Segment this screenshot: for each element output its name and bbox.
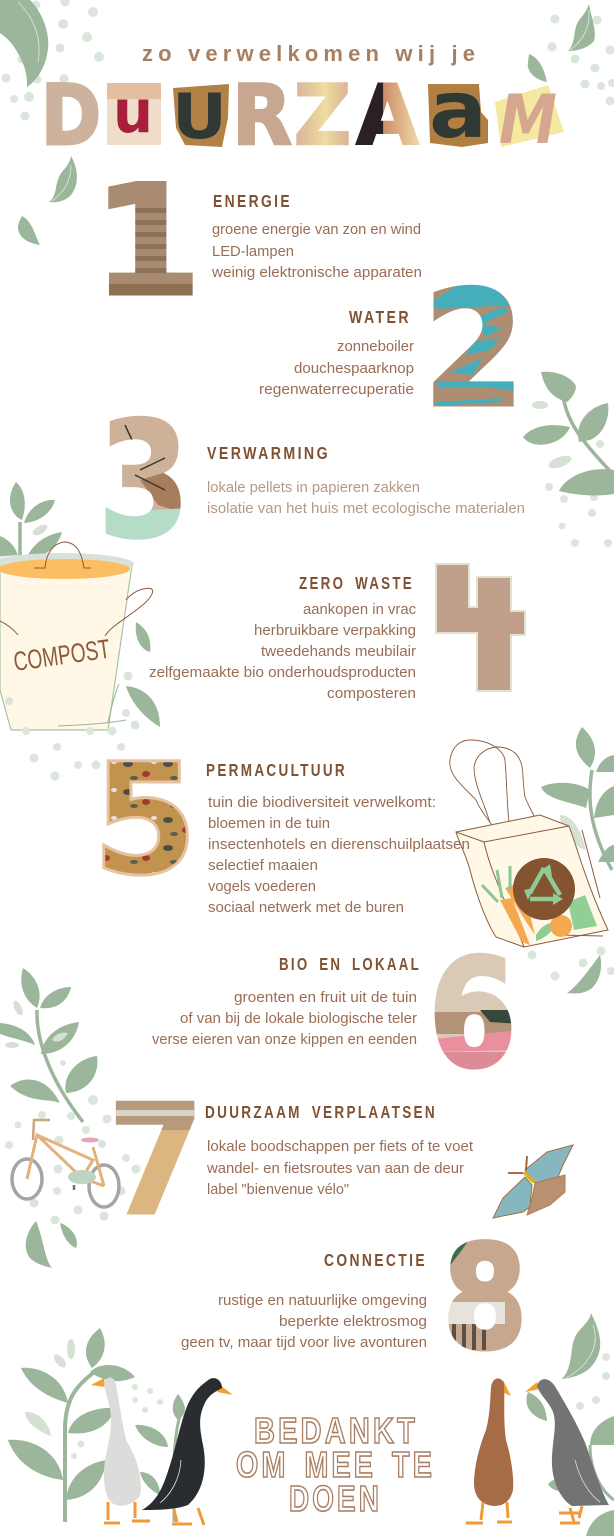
list connectie: geen tv, maar tijd voor live avonturen [181,1335,427,1351]
heading energie: ENERGIE [213,191,292,211]
list zero waste: herbruikbare verpakking [254,623,416,639]
heading: DUURZAAM collage letters: D [41,67,101,164]
plant: right of section 2 and 3 [523,372,614,547]
list zero waste: composteren [327,686,416,702]
heading zero waste: ZERO WASTE [299,573,414,593]
duck: brown [466,1378,513,1523]
heading: DUURZAAM collage letters: Z [294,67,351,164]
list zero waste: aankopen in vrac [303,602,416,618]
heading: DUURZAAM collage letters: A [356,67,419,164]
list verwarming: lokale pellets in papieren zakken [207,480,420,496]
digit 3: 3 [98,387,190,574]
plant: bottom left [8,1328,185,1522]
section 2: water [259,256,525,443]
list duurzaam verplaatsen: wandel- en fietsroutes van aan de deur [206,1161,464,1177]
list water: zonneboiler [337,339,414,355]
list permacultuur: tuin die biodiversiteit verwelkomt: [208,795,436,811]
section 8: connectie [181,1216,527,1381]
list energie [211,222,422,281]
digit 4 [435,563,526,692]
digit 7: 7 [108,1072,204,1249]
bag handles [450,740,542,847]
closing message: OM MEE TE [236,1444,435,1485]
list bio en lokaal [152,990,417,1048]
heading water: WATER [349,307,411,327]
leaf: left of digit 1 large [49,156,77,202]
compost bucket [0,542,153,730]
digit 1: 1 [92,153,202,331]
duck: white [91,1378,150,1523]
list energie: weinig elektronische apparaten [211,265,422,281]
section 1: energie [92,153,422,331]
leaves beside compost bucket [5,622,160,736]
section 6: bio en lokaal [152,928,516,1100]
list permacultuur: selectief maaien [208,858,318,874]
list zero waste [149,602,416,702]
title line: zo verwelkomen wij je [142,41,475,66]
list water [259,339,414,398]
section 5: permacultuur [92,731,470,916]
list zero waste: zelfgemaakte bio onderhoudsproducten [149,665,416,681]
plant: left of section 6 [0,968,97,1122]
list bio en lokaal: of van bij de lokale biologische teler [180,1011,417,1027]
list duurzaam verplaatsen: label "bienvenue vélo" [207,1182,349,1198]
heading: DUURZAAM collage letters: R [232,67,292,164]
list connectie: rustige en natuurlijke omgeving [218,1293,427,1309]
decorative dots: top right [548,14,614,106]
list connectie: beperkte elektrosmog [279,1314,427,1330]
list permacultuur: bloemen in de tuin [208,816,330,832]
list permacultuur [208,795,470,916]
list bio en lokaal: verse eieren van onze kippen en eenden [152,1032,417,1048]
heading connectie: CONNECTIE [324,1250,427,1270]
heading: DUURZAAM collage letters: M [499,81,557,160]
closing message: DOEN [289,1478,382,1519]
heading: DUURZAAM collage letters: a [429,66,487,156]
carrots and greens [500,898,530,945]
list permacultuur: sociaal netwerk met de buren [208,900,404,916]
closing message [236,1410,435,1519]
list water: regenwaterrecuperatie [259,382,414,398]
bag body [456,815,608,947]
digit 4: 4 [429,532,531,728]
heading bio en lokaal: BIO EN LOKAAL [279,954,421,974]
list energie: LED-lampen [212,244,294,260]
decorative dots around bicycle [5,1095,140,1224]
list zero waste: tweedehands meubilair [261,644,416,660]
list duurzaam verplaatsen [206,1139,473,1198]
heading permacultuur: PERMACULTUUR [206,760,347,780]
list energie: groene energie van zon en wind [212,222,421,238]
leaves below bicycle [26,1221,77,1268]
butterfly [493,1145,573,1218]
bicycle [12,1120,119,1207]
heading: DUURZAAM collage letters: U [172,80,227,153]
digit 6: 6 [429,928,516,1100]
list duurzaam verplaatsen: lokale boodschappen per fiets of te voet [207,1139,473,1155]
leaf: near title right [528,54,547,82]
closing message: BEDANKT [254,1410,418,1451]
heading: DUURZAAM collage letters [41,66,564,164]
plant: behind compost bucket [0,482,62,570]
section 7: duurzaam verplaatsen [108,1072,473,1249]
recycling badge [513,858,575,920]
list permacultuur: vogels voederen [208,879,316,895]
decorative dots: left of digit 5 [30,743,125,780]
heading: DUURZAAM collage letters: u [113,77,153,147]
list bio en lokaal: groenten en fruit uit de tuin [234,990,417,1006]
heading verwarming: VERWARMING [207,443,330,463]
digit 8: 8 [443,1216,527,1381]
section 3: verwarming [98,387,525,574]
leaf: top right [568,4,595,51]
section 4: zero waste [150,563,526,701]
decorative dots: top left [2,0,104,120]
plant: bottom right [526,1313,614,1536]
duck: black [142,1378,233,1525]
leaf: left of digit 1 small [18,216,40,245]
big leaf: top left [0,0,48,87]
list connectie [181,1293,427,1351]
duck: gray [525,1379,609,1523]
digit 2: 2 [423,256,525,443]
plant: right of section 5 [528,727,614,993]
list verwarming [207,480,525,517]
list water: douchespaarknop [294,361,414,377]
shopping bag with recycling symbol [450,740,608,947]
list verwarming: isolatie van het huis met ecologische materialen [207,501,525,517]
list permacultuur: insectenhotels en dierenschuilplaatsen [208,837,470,853]
label: compost: COMPOST [12,634,112,677]
digit 5: 5 [92,731,198,910]
heading duurzaam verplaatsen: DUURZAAM VERPLAATSEN [205,1102,437,1122]
